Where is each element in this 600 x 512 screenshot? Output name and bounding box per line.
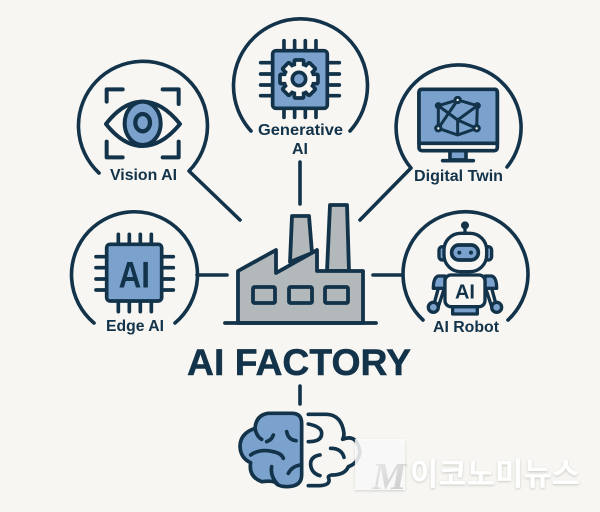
connector: factory to brain — [298, 386, 302, 404]
icon: robot — [428, 223, 502, 314]
label: AI Robot: AI Robot — [433, 319, 500, 336]
icon: monitor with wireframe cube — [419, 89, 497, 161]
title: AI FACTORY — [187, 342, 411, 383]
label: Digital Twin: Digital Twin — [414, 168, 503, 185]
watermark: name: 이코노미뉴스 — [410, 457, 580, 492]
ring: Digital Twin — [360, 65, 521, 220]
icon: chip with gear — [261, 41, 339, 117]
connector: Edge AI to factory — [197, 273, 227, 277]
panel: Generative AI — [233, 19, 367, 158]
label: Generative AI: Generative — [258, 122, 343, 139]
panel: AI Robot — [373, 212, 528, 336]
ring: AI Robot — [403, 212, 528, 320]
icon: factory — [225, 205, 376, 323]
label: Generative AI: AI — [292, 141, 308, 158]
panel: Vision AI — [78, 61, 240, 220]
label: Vision AI: Vision AI — [110, 167, 177, 184]
connector: Generative AI to factory — [298, 162, 302, 204]
icon: AI chip: AI — [119, 254, 150, 296]
label: Generative AI — [258, 122, 343, 158]
icon: brain — [240, 413, 360, 487]
icon: AI chip — [96, 234, 173, 312]
ring: Edge AI — [72, 212, 198, 323]
panel: Digital Twin — [360, 65, 521, 220]
watermark: logo square: M — [371, 456, 407, 498]
connector: AI Robot to factory — [373, 273, 403, 277]
ring: Vision AI — [78, 61, 240, 220]
ring: Generative AI — [233, 19, 367, 131]
label: Edge AI: Edge AI — [106, 318, 164, 335]
icon: eye — [106, 89, 180, 157]
watermark: logo square — [355, 439, 407, 498]
panel: Edge AI — [72, 212, 227, 335]
icon: robot: AI — [455, 280, 475, 303]
